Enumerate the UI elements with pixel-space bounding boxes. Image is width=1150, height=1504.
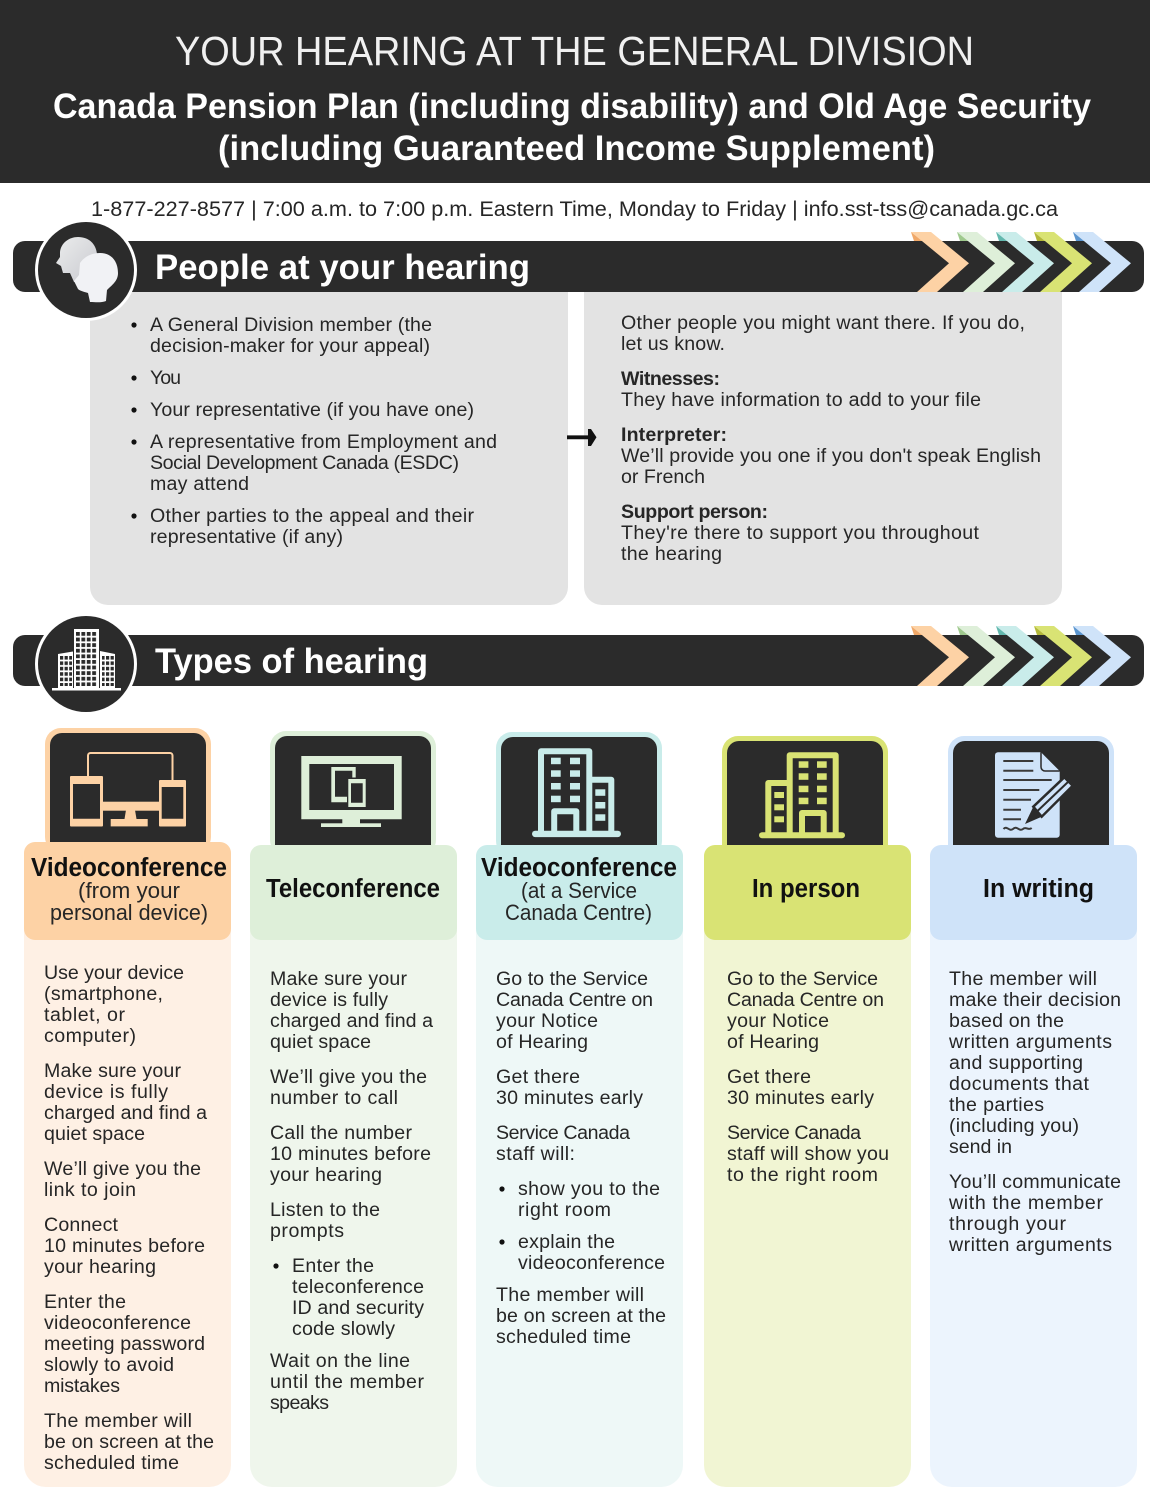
steps: written arguments bbox=[948, 1234, 1112, 1256]
heading bbox=[481, 854, 677, 925]
steps: speaks bbox=[270, 1392, 329, 1414]
panel: people at hearing (left): may attend bbox=[150, 473, 249, 495]
heading: personal device) bbox=[50, 900, 208, 925]
icon: office towers bbox=[35, 613, 137, 715]
steps: Enter the bbox=[292, 1255, 374, 1277]
panel: people at hearing (left): A General Division member (the bbox=[150, 314, 432, 336]
steps: Get there bbox=[496, 1066, 580, 1088]
heading: In writing bbox=[983, 875, 1094, 903]
icon: monitor with devices bbox=[301, 756, 402, 827]
steps: meeting password bbox=[44, 1333, 205, 1355]
panel: people at hearing (left): decision-maker for your appeal) bbox=[150, 335, 430, 357]
steps: 10 minutes before bbox=[44, 1235, 205, 1257]
steps: Canada Centre on bbox=[496, 989, 653, 1011]
contact line: 1-877-227-8577 | 7:00 a.m. to 7:00 p.m. Eastern Time, Monday to Friday | info.sst-tss@canada.gc.ca bbox=[91, 197, 1058, 221]
steps: based on the bbox=[949, 1010, 1064, 1032]
panel: other people (right): Interpreter: bbox=[621, 424, 727, 446]
arrow: people to others bbox=[567, 429, 596, 446]
heading: People at your hearing bbox=[155, 248, 530, 287]
steps: to the right room bbox=[727, 1164, 878, 1186]
steps: videoconference bbox=[518, 1252, 665, 1274]
subtitle: (including Guaranteed Income Supplement) bbox=[218, 129, 935, 168]
steps: documents that bbox=[949, 1073, 1090, 1095]
steps: your Notice bbox=[727, 1010, 829, 1032]
steps: Service Canada bbox=[727, 1122, 861, 1144]
steps bbox=[948, 968, 1121, 1256]
panel: videoconference at Service Canada Centre bbox=[476, 732, 683, 1487]
steps: make their decision bbox=[949, 989, 1121, 1011]
steps: be on screen at the bbox=[496, 1305, 666, 1327]
icon: document and pencil bbox=[995, 752, 1073, 838]
steps: show you to the bbox=[518, 1178, 660, 1200]
panel: people at hearing (left): Your representative (if you have one) bbox=[150, 399, 474, 421]
panel: other people (right): the hearing bbox=[621, 543, 722, 565]
panel: people at hearing (left): A representative from Employment and bbox=[150, 431, 497, 453]
chevrons bbox=[911, 232, 1131, 292]
subtitle bbox=[53, 87, 1092, 168]
heading: Videoconference bbox=[31, 854, 227, 882]
steps: with the member bbox=[948, 1192, 1103, 1214]
steps: The member will bbox=[949, 968, 1097, 990]
steps: We’ll give you the bbox=[44, 1158, 201, 1180]
icon: two heads bbox=[35, 219, 137, 321]
panel: videoconference from personal device bbox=[24, 728, 231, 1487]
steps: staff will: bbox=[496, 1143, 575, 1165]
steps: mistakes bbox=[44, 1375, 120, 1397]
icon: building bbox=[759, 755, 845, 838]
heading: (at a Service bbox=[521, 878, 637, 903]
steps: Make sure your bbox=[270, 968, 407, 990]
steps: Service Canada bbox=[496, 1122, 630, 1144]
steps: device is fully bbox=[44, 1081, 168, 1103]
icon: devices bbox=[70, 753, 186, 826]
steps: tablet, or bbox=[44, 1004, 125, 1026]
steps: be on screen at the bbox=[44, 1431, 214, 1453]
steps: We’ll give you the bbox=[270, 1066, 427, 1088]
section bar: types of hearing bbox=[13, 626, 1144, 686]
steps: teleconference bbox=[292, 1276, 424, 1298]
steps bbox=[44, 962, 214, 1474]
steps: ID and security bbox=[292, 1297, 424, 1319]
steps: scheduled time bbox=[496, 1326, 631, 1348]
panel: other people (right): They're there to support you throughout bbox=[621, 522, 980, 544]
steps: slowly to avoid bbox=[44, 1354, 174, 1376]
steps: The member will bbox=[496, 1284, 644, 1306]
steps bbox=[727, 968, 889, 1186]
steps bbox=[270, 968, 433, 1414]
header banner bbox=[0, 0, 1150, 183]
panel: other people (right) bbox=[584, 285, 1062, 605]
subtitle: Canada Pension Plan (including disability) and Old Age Security bbox=[53, 87, 1092, 126]
panel: people at hearing (left): representative (if any) bbox=[150, 526, 343, 548]
heading: Canada Centre) bbox=[505, 900, 652, 925]
steps bbox=[496, 968, 666, 1348]
steps: Get there bbox=[727, 1066, 811, 1088]
steps: Wait on the line bbox=[270, 1350, 410, 1372]
steps: code slowly bbox=[292, 1318, 395, 1340]
steps: device is fully bbox=[270, 989, 388, 1011]
steps: (including you) bbox=[949, 1115, 1079, 1137]
steps: quiet space bbox=[44, 1123, 145, 1145]
icon: building bbox=[532, 751, 621, 837]
heading bbox=[31, 854, 227, 925]
steps: until the member bbox=[270, 1371, 424, 1393]
steps: of Hearing bbox=[727, 1031, 819, 1053]
panel: in person bbox=[704, 736, 911, 1487]
steps: Canada Centre on bbox=[727, 989, 884, 1011]
panel: other people (right): let us know. bbox=[621, 333, 725, 355]
heading: In person bbox=[752, 875, 860, 903]
steps: 30 minutes early bbox=[496, 1087, 643, 1109]
steps: of Hearing bbox=[496, 1031, 588, 1053]
steps: Use your device bbox=[44, 962, 184, 984]
panel: other people (right): Other people you might want there. If you do, bbox=[621, 312, 1025, 334]
title: YOUR HEARING AT THE GENERAL DIVISION bbox=[175, 28, 974, 74]
steps: Connect bbox=[44, 1214, 119, 1236]
panel: other people (right): Witnesses: bbox=[621, 368, 720, 390]
steps: staff will show you bbox=[727, 1143, 889, 1165]
steps: Call the number bbox=[270, 1122, 412, 1144]
panel: people at hearing (left) bbox=[90, 285, 568, 605]
heading: Types of hearing bbox=[155, 642, 428, 681]
steps: You’ll communicate bbox=[949, 1171, 1121, 1193]
heading: Teleconference bbox=[266, 875, 440, 903]
steps: Go to the Service bbox=[727, 968, 878, 990]
steps: (smartphone, bbox=[44, 983, 163, 1005]
steps: 10 minutes before bbox=[270, 1143, 431, 1165]
steps: charged and find a bbox=[270, 1010, 433, 1032]
steps: number to call bbox=[270, 1087, 398, 1109]
heading: (from your bbox=[78, 878, 180, 903]
steps: your hearing bbox=[44, 1256, 156, 1278]
steps: charged and find a bbox=[44, 1102, 207, 1124]
steps: right room bbox=[518, 1199, 611, 1221]
steps: the parties bbox=[949, 1094, 1044, 1116]
chevrons bbox=[911, 626, 1131, 686]
steps: your hearing bbox=[270, 1164, 382, 1186]
steps: your Notice bbox=[496, 1010, 598, 1032]
steps: written arguments bbox=[948, 1031, 1112, 1053]
steps: 30 minutes early bbox=[727, 1087, 874, 1109]
panel: people at hearing (left): Social Development Canada (ESDC) bbox=[150, 452, 459, 474]
steps: Listen to the bbox=[270, 1199, 380, 1221]
panel: other people (right): or French bbox=[621, 466, 705, 488]
section bar: people at your hearing bbox=[13, 232, 1144, 292]
panel: teleconference bbox=[250, 731, 457, 1487]
steps: quiet space bbox=[270, 1031, 371, 1053]
panel: other people (right): We’ll provide you one if you don't speak English bbox=[621, 445, 1041, 467]
steps: videoconference bbox=[44, 1312, 191, 1334]
steps: link to join bbox=[44, 1179, 136, 1201]
panel: people at hearing (left): You bbox=[150, 367, 181, 389]
panel: people at hearing (left): Other parties to the appeal and their bbox=[150, 505, 474, 527]
steps: Make sure your bbox=[44, 1060, 181, 1082]
steps: and supporting bbox=[949, 1052, 1083, 1074]
panel: other people (right): Support person: bbox=[621, 501, 768, 523]
steps: through your bbox=[949, 1213, 1066, 1235]
steps: Go to the Service bbox=[496, 968, 648, 990]
steps: send in bbox=[949, 1136, 1012, 1158]
steps: explain the bbox=[518, 1231, 615, 1253]
steps: computer) bbox=[44, 1025, 136, 1047]
heading: Videoconference bbox=[481, 854, 677, 882]
steps: scheduled time bbox=[44, 1452, 179, 1474]
steps: prompts bbox=[270, 1220, 344, 1242]
steps: The member will bbox=[44, 1410, 192, 1432]
panel: other people (right): They have information to add to your file bbox=[621, 389, 981, 411]
steps: Enter the bbox=[44, 1291, 126, 1313]
panel: in writing bbox=[930, 736, 1137, 1487]
